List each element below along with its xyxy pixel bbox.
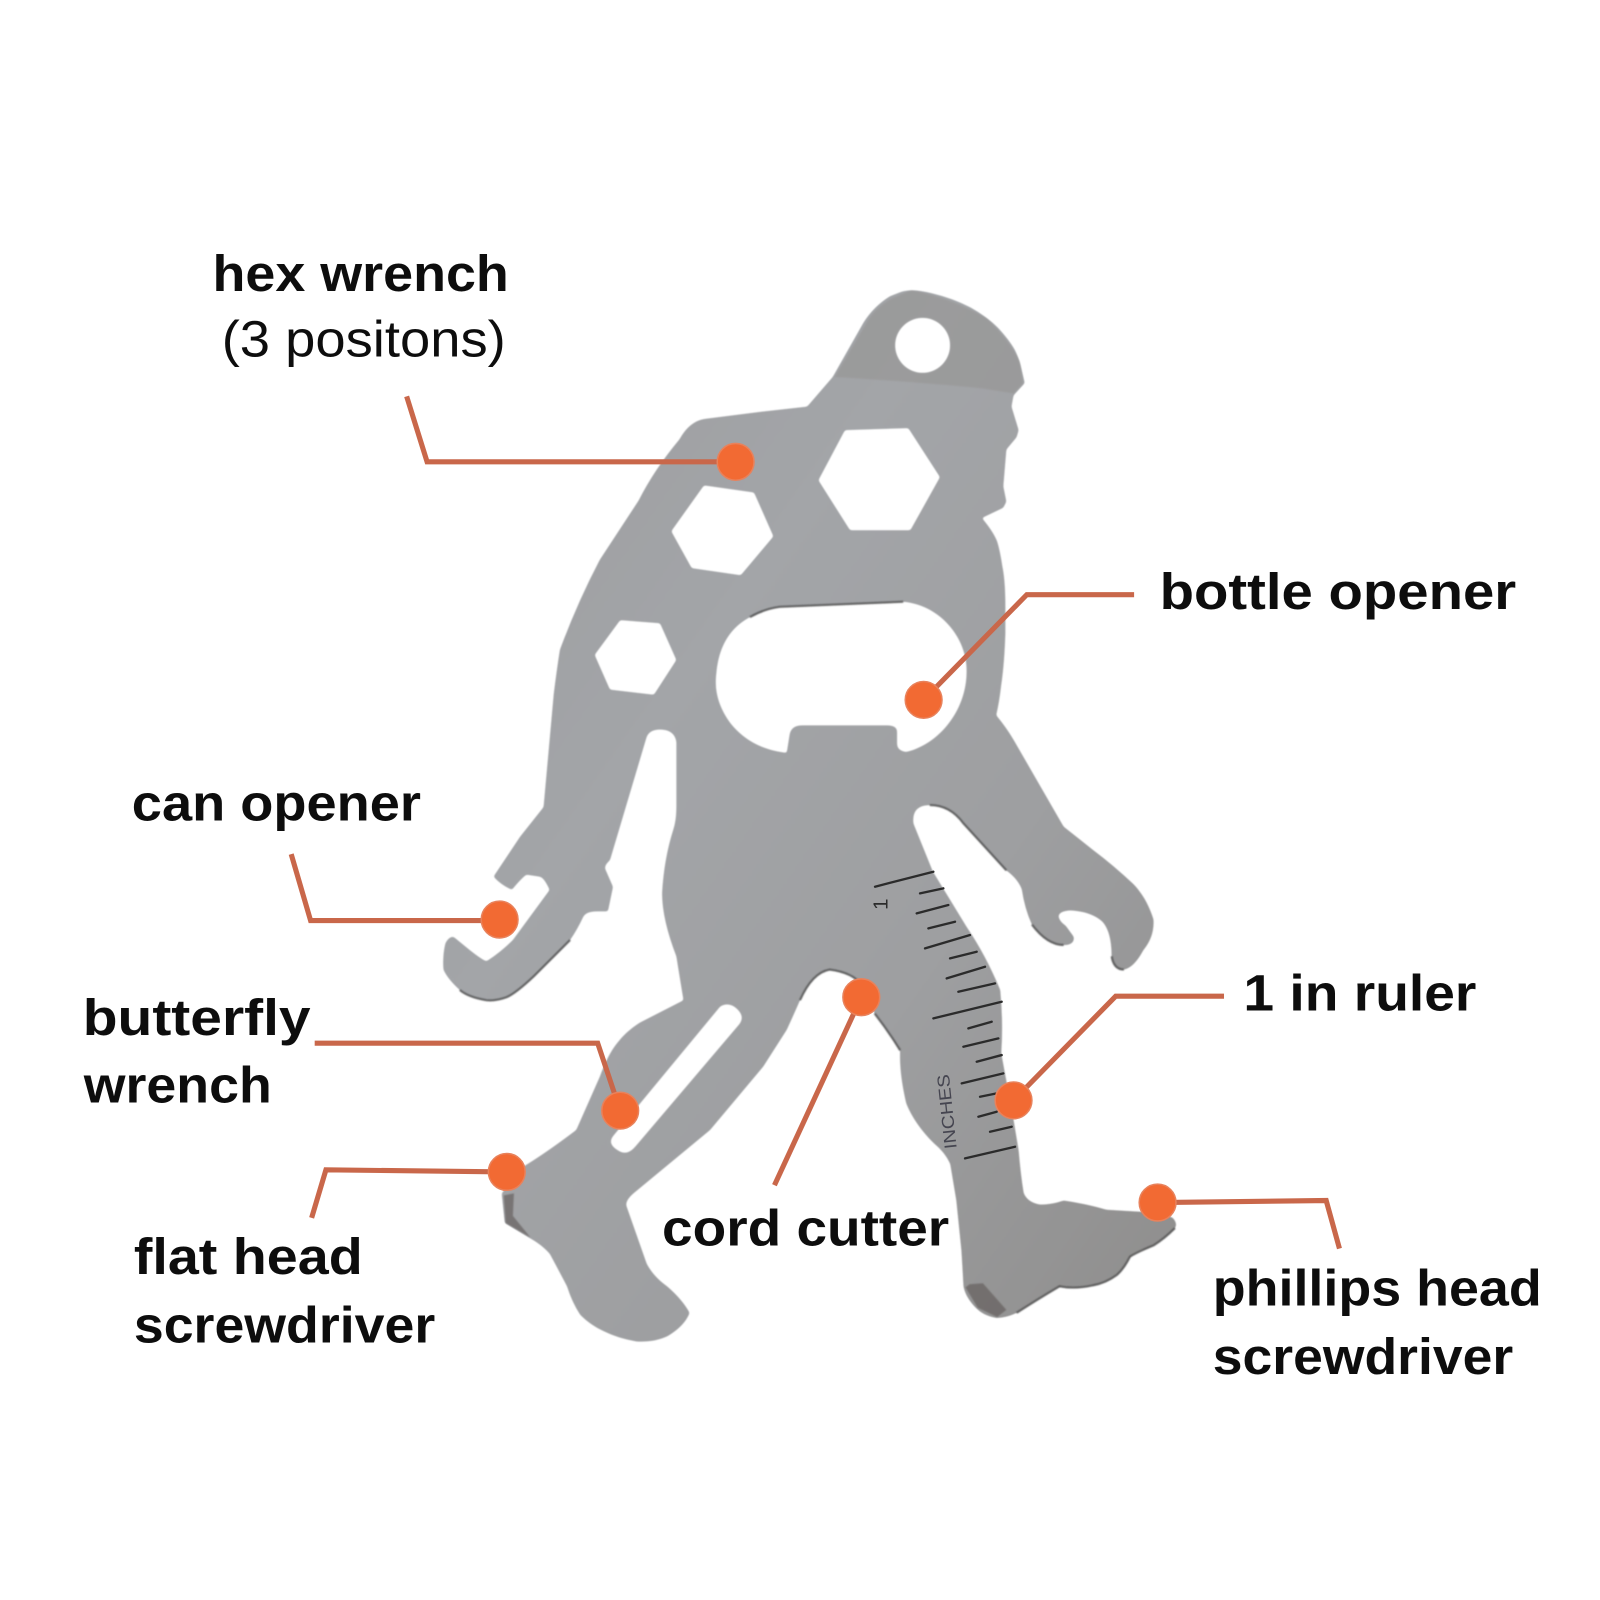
callout: bottle opener — [905, 563, 1516, 718]
marker dot — [1139, 1184, 1176, 1221]
marker dot — [481, 901, 518, 938]
leader line — [1014, 996, 1224, 1100]
marker dot — [488, 1154, 525, 1190]
callout: hex wrench — [213, 245, 754, 480]
marker dot — [843, 979, 880, 1016]
callout: can opener — [132, 774, 518, 938]
callout: 1 in ruler — [995, 964, 1476, 1119]
label: cord cutter — [662, 1199, 949, 1256]
dark heel shading — [504, 1193, 1006, 1317]
leader line — [315, 1043, 620, 1111]
leader line — [407, 396, 736, 462]
leader line — [291, 854, 500, 921]
marker dot — [717, 443, 754, 480]
dark edge highlights — [460, 602, 1175, 1313]
heading: hex wrench: hex wrench — [213, 245, 509, 302]
callout: phillips head screwdriver — [1139, 1184, 1542, 1385]
ruler INCHES mark: INCHES — [933, 1073, 961, 1150]
marker dot — [905, 681, 942, 718]
marker dot — [602, 1092, 639, 1129]
leader line — [774, 997, 861, 1185]
head shading — [835, 290, 1023, 393]
ruler markings — [869, 872, 1015, 1158]
label line 2: screwdriver — [134, 1297, 435, 1354]
label line 2: wrench — [83, 1056, 272, 1113]
label line 2: screwdriver — [1213, 1328, 1513, 1385]
label line 1: flat head — [134, 1228, 363, 1285]
callout: cord cutter — [662, 979, 949, 1256]
callout: flat head screwdriver — [134, 1154, 525, 1354]
label: can opener — [132, 774, 421, 831]
leader line — [1158, 1201, 1339, 1249]
leader line — [312, 1170, 507, 1218]
label line 1: butterfly — [83, 989, 311, 1046]
label: 1 in ruler — [1243, 964, 1476, 1021]
leader line — [924, 595, 1134, 700]
multi-tool silhouette — [443, 290, 1176, 1342]
ruler numeral 1: 1 — [869, 899, 892, 910]
marker dot — [995, 1082, 1032, 1119]
callout: butterfly wrench — [83, 989, 639, 1129]
label line 1: phillips head — [1213, 1260, 1542, 1317]
note: 3 positions: (3 positons) — [222, 311, 506, 368]
metal body with hex, bottle opener and slot cut-outs — [443, 290, 1176, 1342]
label: bottle opener — [1160, 563, 1516, 620]
